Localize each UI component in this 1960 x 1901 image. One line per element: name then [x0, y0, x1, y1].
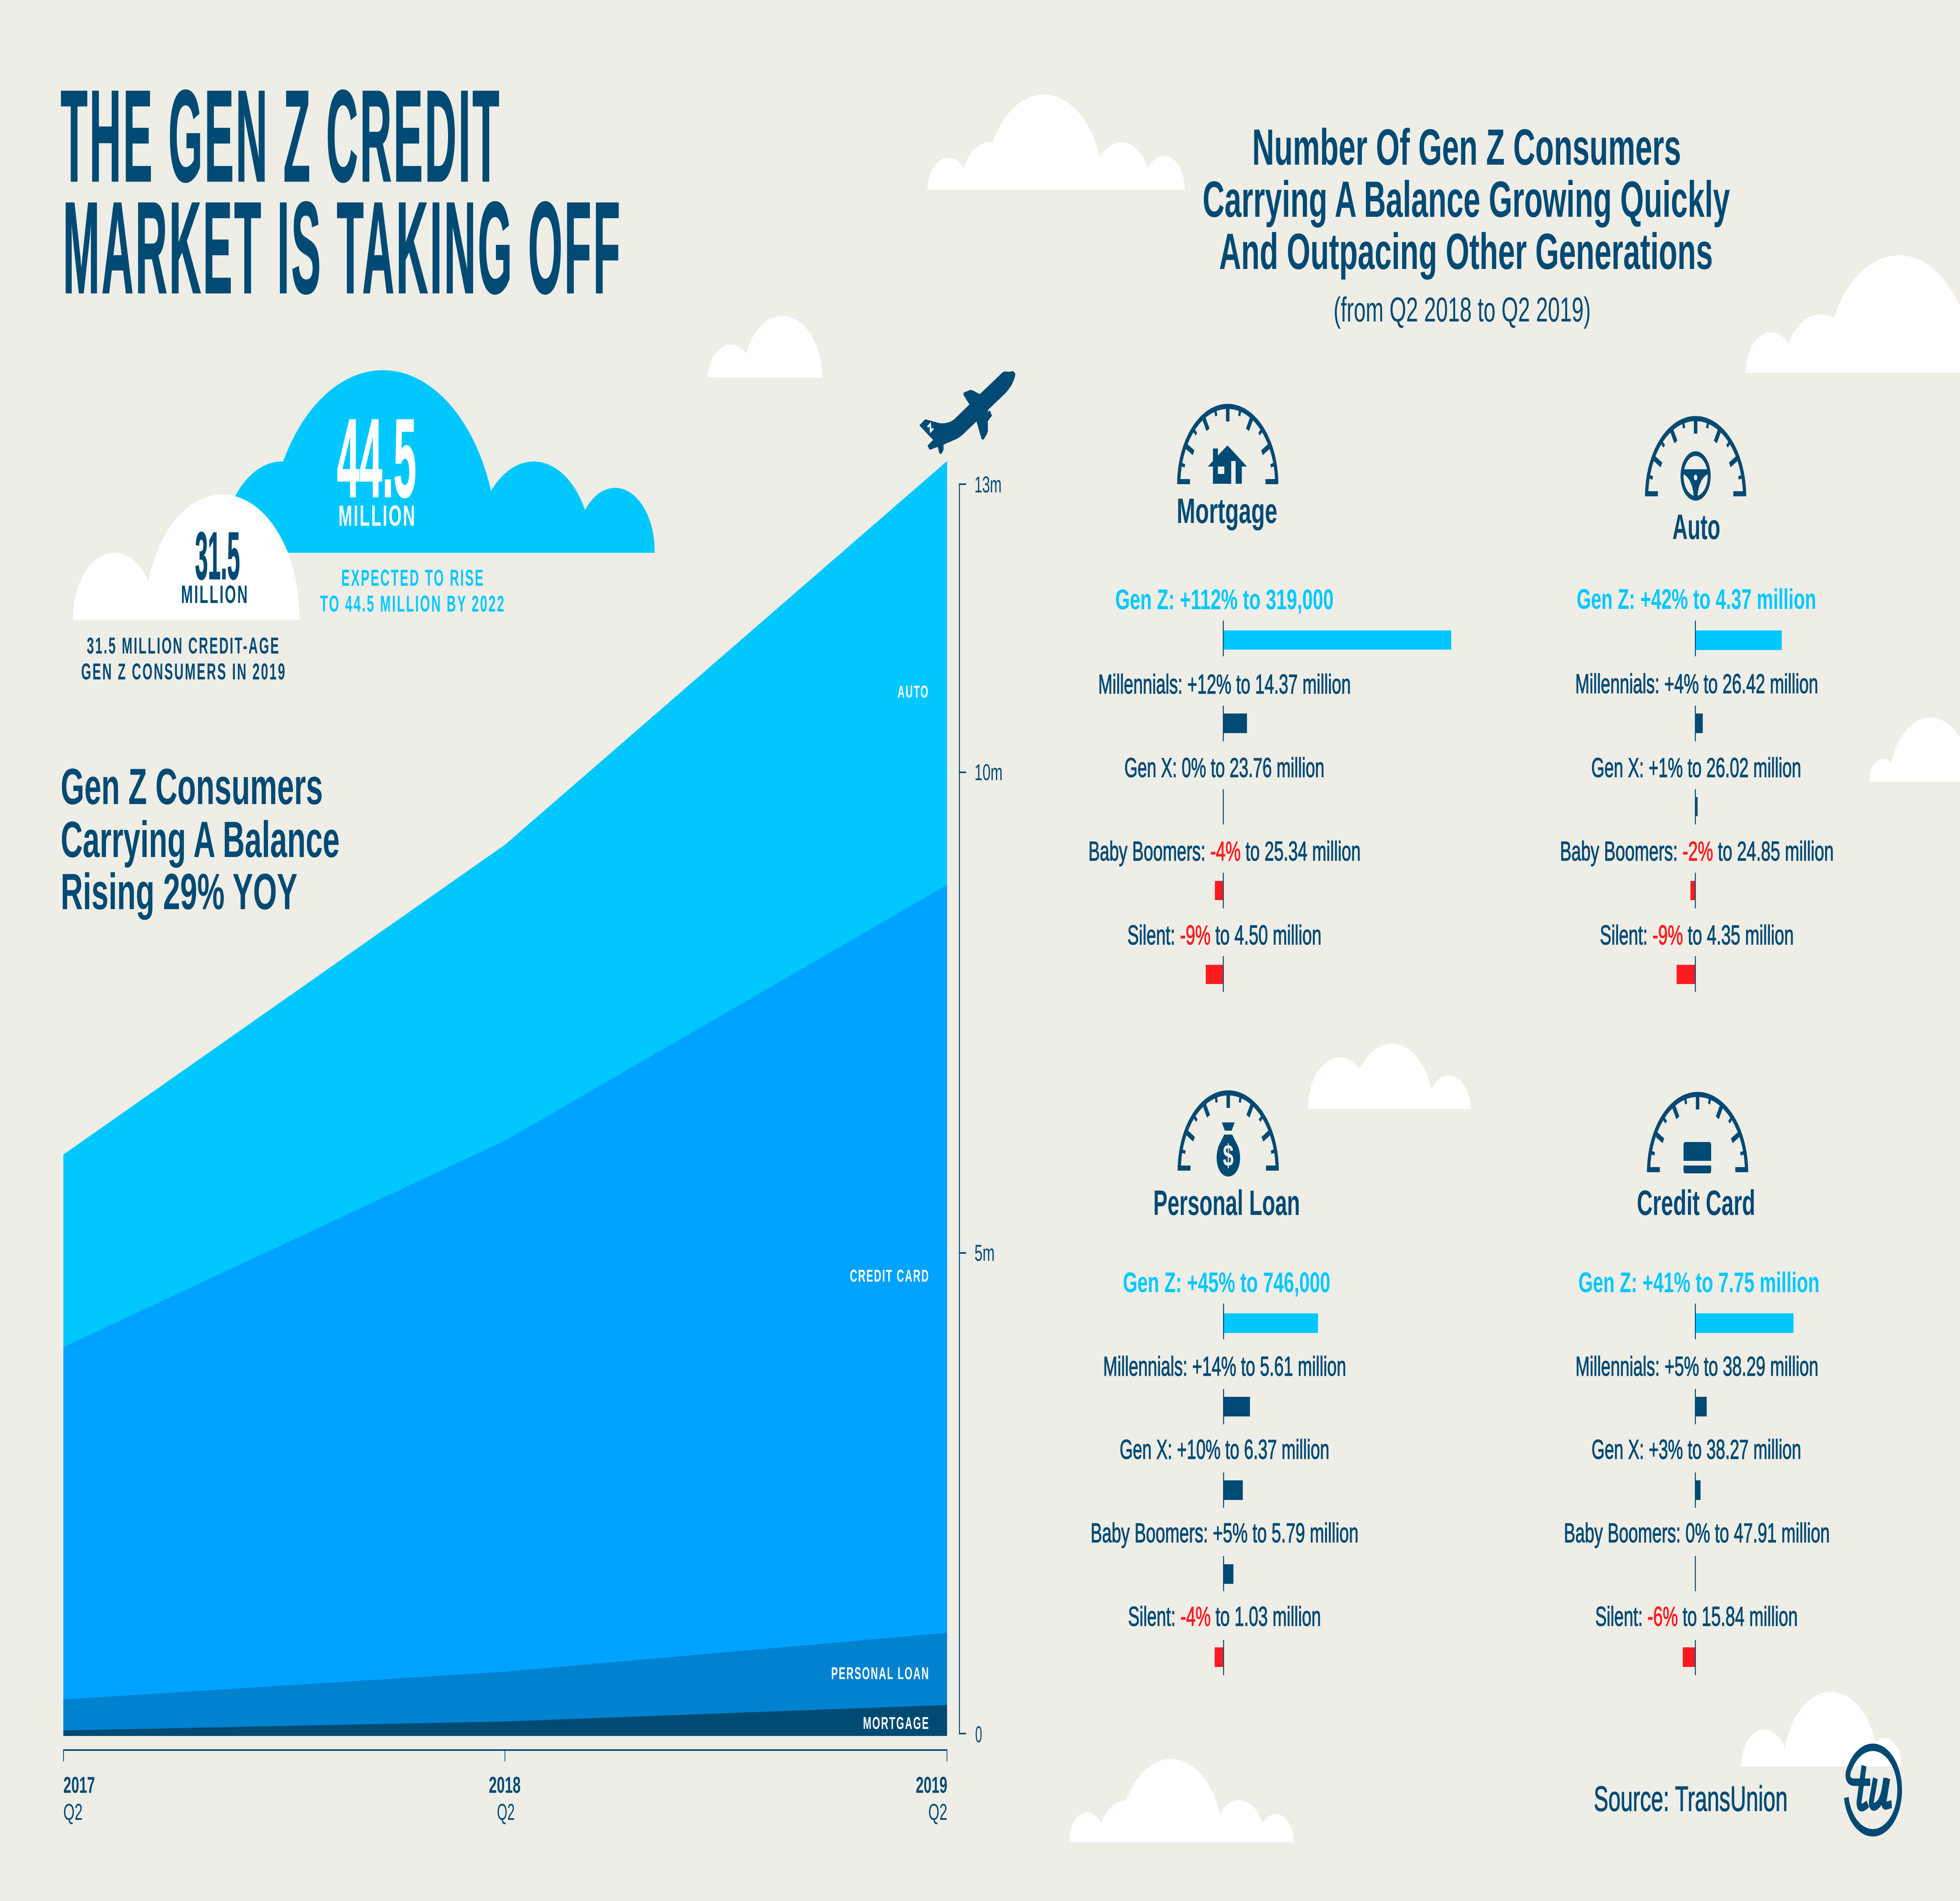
panel: credit card [1564, 1095, 1830, 1675]
y axis: 13m [975, 472, 1002, 497]
heading: number of Gen Z consumers: Number Of Gen Z Consumers [1252, 119, 1681, 176]
callout: 44.5 million cloud [234, 370, 655, 553]
row: gen z: Gen Z: +41% to 7.75 million [1579, 1267, 1819, 1298]
icon: auto gauge with steering wheel [1645, 419, 1746, 498]
icon: TransUnion logo [1846, 1747, 1900, 1833]
cloud: small near chart [707, 316, 822, 378]
row: baby boomers: Baby Boomers: -2% to 24.85 million [1560, 836, 1834, 867]
row: gen x: Gen X: 0% to 23.76 million [1124, 753, 1325, 783]
heading: number of Gen Z consumers [1203, 119, 1730, 280]
source: Source: TransUnion [1594, 1779, 1788, 1818]
heading: rising 29% YOY: Gen Z Consumers [61, 759, 323, 815]
callout: 44.5 million cloud: 44.5 [337, 396, 416, 521]
row: baby boomers [1089, 836, 1361, 908]
row: gen x: Gen X: +1% to 26.02 million [1591, 753, 1801, 783]
heading: number of Gen Z consumers: Carrying A Balance Growing Quickly [1203, 171, 1730, 228]
row: gen z [1123, 1267, 1330, 1339]
heading: rising 29% YOY [61, 759, 339, 921]
caption: credit-age consumers: GEN Z CONSUMERS IN 2019 [81, 659, 286, 685]
caption: credit-age consumers: 31.5 MILLION CREDIT-AGE [87, 634, 280, 659]
row: gen x [1120, 1434, 1329, 1508]
row: baby boomers [1091, 1518, 1358, 1591]
panel: mortgage [1089, 407, 1451, 992]
row: millennials: Millennials: +5% to 38.29 million [1575, 1351, 1818, 1382]
row: baby boomers: Baby Boomers: 0% to 47.91 million [1564, 1518, 1830, 1549]
heading: rising 29% YOY: Rising 29% YOY [61, 864, 298, 921]
title: MARKET IS TAKING OFF [63, 174, 622, 321]
row: silent [1595, 1601, 1798, 1675]
panel: personal loan [1091, 1093, 1358, 1675]
label: credit card: CREDIT CARD [850, 1266, 929, 1285]
callout: 31.5 million cloud: MILLION [181, 581, 249, 608]
row: millennials [1103, 1351, 1346, 1424]
x axis: 2019 [916, 1773, 947, 1798]
row: millennials [1575, 669, 1818, 741]
heading: number of Gen Z consumers: And Outpacing Other Generations [1219, 223, 1713, 280]
area: auto [64, 461, 947, 1736]
row: silent: Silent: -9% to 4.50 million [1127, 920, 1321, 951]
icon: mortgage gauge with house [1177, 407, 1278, 484]
row: silent: Silent: -4% to 1.03 million [1128, 1601, 1321, 1632]
area chart [64, 461, 947, 1736]
icon: personal loan gauge with money bag [1178, 1093, 1279, 1177]
icon: credit card gauge with card [1647, 1095, 1748, 1173]
caption: expected to rise: EXPECTED TO RISE [341, 566, 485, 591]
row: gen z: Gen Z: +45% to 746,000 [1123, 1267, 1330, 1298]
row: millennials: Millennials: +14% to 5.61 million [1103, 1351, 1346, 1382]
callout: 31.5 million cloud: 31.5 [195, 519, 240, 594]
x axis [63, 1749, 947, 1825]
y axis: 5m [975, 1241, 995, 1266]
row: gen x [1591, 753, 1801, 824]
row: gen x: Gen X: +3% to 38.27 million [1592, 1434, 1801, 1465]
row: gen x [1592, 1434, 1801, 1508]
row: baby boomers: Baby Boomers: -4% to 25.34 million [1089, 836, 1361, 867]
subheading: date range: (from Q2 2018 to Q2 2019) [1334, 290, 1591, 329]
row: gen z [1579, 1267, 1819, 1339]
caption: expected to rise [320, 566, 505, 617]
row: silent [1600, 920, 1794, 992]
row: millennials: Millennials: +12% to 14.37 million [1098, 669, 1351, 700]
row: millennials [1575, 1351, 1818, 1424]
heading: personal loan: Personal Loan [1153, 1183, 1300, 1222]
label: mortgage: MORTGAGE [863, 1713, 929, 1733]
cloud: top right [1746, 255, 1960, 373]
label: personal loan: PERSONAL LOAN [831, 1663, 929, 1683]
heading: mortgage: Mortgage [1177, 491, 1277, 530]
area: mortgage [64, 1705, 947, 1736]
y axis: 0 [975, 1722, 982, 1747]
heading: rising 29% YOY: Carrying A Balance [61, 812, 339, 868]
row: silent: Silent: -9% to 4.35 million [1600, 920, 1794, 951]
caption: credit-age consumers [81, 634, 286, 685]
row: gen z: Gen Z: +42% to 4.37 million [1577, 583, 1816, 615]
heading: credit card: Credit Card [1637, 1183, 1755, 1222]
row: gen z: Gen Z: +112% to 319,000 [1115, 584, 1334, 616]
row: silent: Silent: -6% to 15.84 million [1595, 1601, 1798, 1632]
caption: expected to rise: TO 44.5 MILLION BY 2022 [320, 592, 505, 617]
row: baby boomers [1560, 836, 1834, 908]
cloud: bottom [1069, 1759, 1294, 1842]
area: credit card [64, 885, 947, 1736]
row: gen z [1577, 583, 1816, 656]
x axis: 2018 [489, 1773, 521, 1798]
cloud: top centre [927, 94, 1185, 190]
label: auto: AUTO [898, 682, 929, 701]
area: personal loan [64, 1633, 947, 1736]
panel: auto [1560, 419, 1834, 992]
x axis: Q2 [497, 1800, 515, 1825]
callout: 44.5 million cloud: MILLION [338, 500, 416, 532]
title [61, 63, 622, 321]
row: millennials: Millennials: +4% to 26.42 million [1575, 669, 1818, 699]
row: baby boomers: Baby Boomers: +5% to 5.79 million [1091, 1518, 1358, 1549]
heading: auto: Auto [1672, 507, 1720, 547]
callout: 31.5 million cloud [73, 494, 299, 620]
row: gen z [1115, 584, 1451, 656]
cloud: behind logo [1741, 1692, 1901, 1767]
cloud: right edge [1869, 717, 1960, 782]
row: gen x: Gen X: +10% to 6.37 million [1120, 1434, 1329, 1465]
x axis: Q2 [64, 1800, 83, 1825]
title: THE GEN Z CREDIT [61, 63, 501, 209]
y axis: 10m [975, 760, 1003, 785]
icon: personal loan gauge with money bag: $ [1223, 1138, 1234, 1173]
y axis [959, 472, 1003, 1747]
x axis: Q2 [928, 1800, 947, 1825]
row: silent [1127, 920, 1321, 992]
row: millennials [1098, 669, 1351, 741]
icon: airplane [920, 372, 1015, 454]
row: silent [1128, 1601, 1321, 1675]
cloud: middle [1308, 1044, 1471, 1109]
x axis: 2017 [64, 1773, 95, 1798]
